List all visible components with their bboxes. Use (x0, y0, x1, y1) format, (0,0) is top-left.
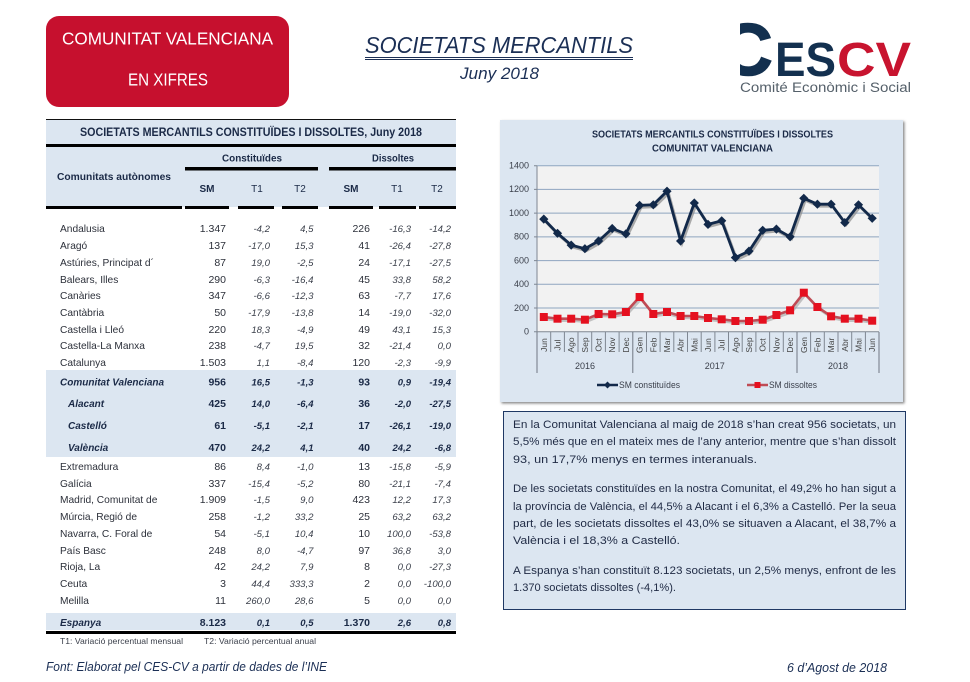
table rows: remaining communities: 337 (208, 478, 226, 490)
table rows: remaining communities: 0,0 (438, 596, 452, 607)
table rows: autonomous communities: 120 (352, 357, 370, 369)
table rows: remaining communities: 8 (364, 561, 370, 573)
table title band (46, 119, 456, 207)
table rows: remaining communities: -100,0 (424, 579, 452, 590)
chart title: SOCIETATS MERCANTILS CONSTITUÏDES I DISSOLTES (592, 130, 833, 140)
table rows: autonomous communities: 226 (352, 223, 370, 235)
table rows: autonomous communities: -13,8 (292, 308, 314, 319)
panel: commentary text (504, 412, 906, 610)
x axis ticks and month labels (537, 332, 879, 373)
table rows: remaining communities: 13 (358, 461, 370, 473)
table rows: remaining communities: Navarra, C. Foral de (60, 529, 153, 540)
table column headers: Constituïdes (222, 152, 282, 164)
table rows: remaining communities: 33,2 (295, 512, 314, 523)
highlighted band: Comunitat Valenciana and provinces: 24,2 (250, 443, 271, 454)
y axis labels: 400 (514, 279, 529, 289)
data series: SM constituïdes (544, 191, 874, 260)
x axis ticks and month labels: Feb (648, 337, 658, 352)
table rows: remaining communities: 2 (364, 578, 370, 590)
footer: source: Font: Elaborat pel CES-CV a partir de dades de l’INE (46, 660, 328, 674)
table rows: remaining communities: 0,0 (398, 579, 412, 590)
table rows: autonomous communities: -7,7 (394, 291, 412, 302)
table rows: remaining communities: 17,3 (432, 495, 452, 506)
table rows: autonomous communities: -32,0 (429, 308, 452, 319)
table rows: autonomous communities: -16,4 (292, 275, 314, 286)
table rows: autonomous communities: 15,3 (432, 325, 452, 336)
table column headers: SM (344, 184, 358, 195)
table rows: remaining communities: 10,4 (295, 529, 314, 540)
table rows: remaining communities: -1,5 (253, 495, 271, 506)
table rows: remaining communities: 63,2 (432, 512, 452, 523)
total row: Espanya: 0,5 (300, 618, 314, 629)
table rows: remaining communities: 42 (214, 561, 226, 573)
table rows: autonomous communities: 19,5 (295, 341, 314, 352)
footer: date: 6 d’Agost de 2018 (787, 661, 887, 675)
data series: SM dissoltes (544, 293, 874, 323)
table rows: remaining communities: 8,4 (257, 462, 270, 473)
x axis ticks and month labels: Feb (812, 337, 822, 352)
table rows: autonomous communities: Catalunya (60, 358, 106, 369)
table rows: remaining communities: 7,9 (300, 562, 314, 573)
panel: line chart (500, 120, 903, 402)
paragraph 2: la província de València, el 44,5% a Alacant i el 6,3% a Castelló. Per la seua (513, 501, 897, 513)
table rows: remaining communities: -5,1 (253, 529, 270, 540)
x axis ticks and month labels: Gen (635, 337, 645, 353)
highlighted band: Comunitat Valenciana and provinces: -2,1 (297, 421, 314, 432)
table rows: autonomous communities: -27,5 (429, 258, 452, 269)
table rows: remaining communities: 9,0 (300, 495, 314, 506)
table rows: remaining communities: 24,2 (250, 562, 271, 573)
title: Juny 2018 (459, 65, 540, 83)
table rows: remaining communities: -5,9 (434, 462, 452, 473)
table rows: autonomous communities: 24 (358, 257, 370, 269)
table rows: autonomous communities: -12,3 (292, 291, 314, 302)
x axis ticks and month labels: Ago (566, 337, 576, 353)
table rows: autonomous communities: 41 (358, 240, 370, 252)
table rows: remaining communities: 248 (208, 545, 226, 557)
table rows: autonomous communities: 43,1 (392, 325, 411, 336)
highlighted band: Comunitat Valenciana and provinces: 425 (208, 398, 226, 410)
highlighted band: Comunitat Valenciana and provinces: 0,9 (398, 378, 412, 388)
highlighted band: Comunitat Valenciana and provinces (46, 370, 456, 457)
table rows: autonomous communities: 32 (358, 340, 370, 352)
table rows: remaining communities: -1,0 (297, 462, 314, 473)
highlighted band: Comunitat Valenciana and provinces: 24,2 (392, 443, 412, 454)
table rows: autonomous communities: -4,2 (253, 224, 271, 235)
highlighted band: Comunitat Valenciana and provinces: -19,0 (429, 421, 452, 432)
paragraph 1: 5,5% més que en el mateix mes de l’any anterior, mentre que s’han dissolt (513, 436, 896, 448)
table rows: autonomous communities: 1,1 (257, 358, 270, 369)
total row: Espanya: 2,6 (397, 618, 412, 629)
table rows: autonomous communities: 63 (358, 290, 370, 302)
badge: Comunitat Valenciana en xifres: COMUNITAT VALENCIANA (62, 28, 273, 48)
badge: Comunitat Valenciana en xifres (46, 16, 289, 107)
table rows: autonomous communities: Aragó (60, 241, 88, 252)
highlighted band: Comunitat Valenciana and provinces: -27,5 (429, 399, 452, 410)
paragraph 1: En la Comunitat Valenciana al maig de 2018 s’han creat 956 societats, un (513, 419, 896, 431)
x axis ticks and month labels: Abr (676, 338, 686, 352)
paragraph 2: part, de les societats dissoltes el 43,0% se situaven a Alacant, el 38,7% a (513, 518, 897, 530)
table rows: remaining communities: Ceuta (60, 579, 88, 590)
x axis ticks and month labels: Jul (552, 339, 562, 350)
table rows: autonomous communities: -16,3 (389, 224, 412, 235)
table column headers: T1 (251, 184, 263, 195)
table rows: autonomous communities: -26,4 (389, 241, 411, 252)
table rows: remaining communities: -7,4 (434, 479, 451, 490)
table rows: autonomous communities: -2,3 (394, 358, 412, 369)
table rows: remaining communities: 1.909 (200, 494, 226, 506)
table rows: remaining communities: 63,2 (392, 512, 412, 523)
highlighted band: Comunitat Valenciana and provinces: 956 (208, 376, 226, 388)
x axis ticks and month labels: Nov (771, 337, 781, 353)
highlighted band: Comunitat Valenciana and provinces: -5,1 (254, 421, 270, 432)
total row: Espanya: Espanya (60, 618, 102, 629)
logo: CES CV: CV (837, 34, 911, 87)
table rows: autonomous communities: 4,5 (300, 224, 314, 235)
table notes: T1: Variació percentual mensual (60, 636, 183, 646)
table rows: autonomous communities: -6,3 (253, 275, 271, 286)
x axis ticks and month labels: 2016 (575, 361, 595, 371)
table rows: autonomous communities: 58,2 (432, 275, 452, 286)
table column headers: Comunitats autònomes (57, 171, 171, 183)
table rows: autonomous communities: -19,0 (389, 308, 412, 319)
total row: Espanya (46, 613, 456, 634)
table rows: autonomous communities: 347 (208, 290, 226, 302)
x axis ticks and month labels: 2018 (828, 361, 848, 371)
table rows: remaining communities: 12,2 (392, 495, 412, 506)
table rows: remaining communities: 258 (208, 511, 226, 523)
table rows: remaining communities: 100,0 (387, 529, 412, 540)
table rows: remaining communities: -1,2 (253, 512, 271, 523)
table rows: remaining communities: 86 (214, 461, 226, 473)
table rows: remaining communities: 28,6 (294, 596, 314, 607)
title: SOCIETATS MERCANTILS (365, 32, 634, 58)
table rows: autonomous communities: -2,5 (297, 258, 314, 269)
total row: Espanya: 8.123 (200, 617, 226, 629)
table rows: autonomous communities: 0,0 (438, 341, 452, 352)
x axis ticks and month labels: Mar (826, 338, 836, 352)
x axis ticks and month labels: Dec (785, 337, 795, 353)
y axis labels: 1000 (509, 208, 529, 218)
table notes: T2: Variació percentual anual (204, 636, 316, 646)
plot area and gridlines (534, 166, 879, 332)
table rows: autonomous communities: 50 (214, 307, 226, 319)
highlighted band: Comunitat Valenciana and provinces: 17 (358, 420, 370, 432)
table rows: remaining communities: 36,8 (392, 546, 412, 557)
table rows: remaining communities: Rioja, La (60, 562, 101, 573)
table title band: SOCIETATS MERCANTILS CONSTITUÏDES I DISSOLTES, Juny 2018 (80, 126, 423, 139)
table rows: autonomous communities: 19,0 (251, 258, 271, 269)
highlighted band: Comunitat Valenciana and provinces: 61 (214, 420, 226, 432)
total row: Espanya: 0,8 (438, 618, 452, 629)
paragraph 3 (513, 565, 897, 594)
x axis ticks and month labels: Mai (854, 338, 864, 352)
table rows: autonomous communities: Castella-La Manxa (60, 341, 145, 352)
table rows: autonomous communities: 1.347 (200, 223, 226, 235)
table rows: remaining communities: 5 (364, 595, 370, 607)
table rows: autonomous communities: -8,4 (297, 358, 314, 369)
table rows: remaining communities: -4,7 (297, 546, 314, 557)
table column headers: T2 (431, 184, 443, 195)
paragraph 1 (513, 419, 896, 466)
table rows: autonomous communities: -6,6 (253, 291, 271, 302)
panel: data table (46, 119, 456, 646)
table rows: autonomous communities: 14 (358, 307, 370, 319)
x axis ticks and month labels: Ago (730, 337, 740, 353)
table rows: autonomous communities: 45 (358, 274, 370, 286)
table rows: remaining communities: 333,3 (289, 579, 314, 590)
x axis ticks and month labels: Nov (607, 337, 617, 353)
highlighted band: Comunitat Valenciana and provinces: -6,8 (435, 443, 452, 454)
chart title (592, 130, 833, 154)
y axis labels: 0 (524, 326, 529, 336)
table rows: autonomous communities: Cantàbria (60, 308, 105, 319)
table rows: remaining communities: -15,4 (248, 479, 270, 490)
table rows: autonomous communities: Castella i Lleó (60, 325, 124, 336)
table rows: autonomous communities: -27,8 (429, 241, 452, 252)
table rows: remaining communities: 0,0 (398, 562, 412, 573)
table rows: autonomous communities: Astúries, Principat d´ (60, 257, 154, 269)
table rows: remaining communities: 11 (215, 595, 226, 607)
table rows: remaining communities: Galícia (60, 479, 92, 490)
table rows: autonomous communities: -17,1 (389, 258, 411, 269)
y axis labels: 600 (514, 255, 529, 265)
x axis ticks and month labels: Gen (799, 337, 809, 353)
highlighted band: Comunitat Valenciana and provinces: -6,4 (297, 399, 314, 410)
x axis ticks and month labels: Jun (867, 338, 877, 352)
table rows: autonomous communities: Andalusia (60, 224, 105, 235)
chart title: COMUNITAT VALENCIANA (652, 144, 773, 154)
table rows: autonomous communities (60, 223, 452, 369)
x axis ticks and month labels: Jun (539, 338, 549, 352)
table column headers (46, 152, 456, 209)
highlighted band: Comunitat Valenciana and provinces: Alacant (67, 399, 105, 410)
table rows: remaining communities: -21,1 (389, 479, 411, 490)
x axis ticks and month labels: 2017 (705, 361, 725, 371)
x axis ticks and month labels: Jun (703, 338, 713, 352)
paragraph 2: De les societats constituïdes en la nostra Comunitat, el 49,2% ho han sigut a (513, 483, 897, 495)
total row: Espanya: 0,1 (257, 618, 270, 629)
table rows: remaining communities: -15,8 (389, 462, 412, 473)
table rows: autonomous communities: 87 (214, 257, 226, 269)
table rows: autonomous communities: 49 (358, 324, 370, 336)
table rows: autonomous communities: 33,8 (392, 275, 412, 286)
table rows: remaining communities: 44,4 (251, 579, 270, 590)
table rows: autonomous communities: -14,2 (429, 224, 452, 235)
table rows: autonomous communities: 220 (208, 324, 226, 336)
y axis labels: 1200 (509, 184, 529, 194)
paragraph 1: 93, un 17,7% menys en termes interanuals. (513, 454, 757, 466)
highlighted band: Comunitat Valenciana and provinces: 93 (358, 376, 370, 388)
x axis ticks and month labels: Mai (689, 338, 699, 352)
highlighted band: Comunitat Valenciana and provinces: 36 (358, 398, 370, 410)
table rows: remaining communities: 423 (352, 494, 370, 506)
table rows: autonomous communities: 1.503 (200, 357, 226, 369)
x axis ticks and month labels: Abr (840, 338, 850, 352)
highlighted band: Comunitat Valenciana and provinces: -2,0 (395, 399, 412, 410)
table rows: remaining communities: 3,0 (438, 546, 452, 557)
table rows: autonomous communities: 17,6 (432, 291, 452, 302)
paragraph 3: A Espanya s’han constituït 8.123 societats, un 2,5% menys, enfront de les (513, 565, 897, 577)
highlighted band: Comunitat Valenciana and provinces: -19,4 (429, 378, 452, 388)
highlighted band: Comunitat Valenciana and provinces: València (68, 443, 109, 454)
total row: Espanya: 1.370 (344, 617, 370, 629)
table rows: remaining communities: -5,2 (297, 479, 314, 490)
table rows: remaining communities: Múrcia, Regió de (60, 512, 137, 523)
table rows: autonomous communities: -4,9 (297, 325, 314, 336)
table notes (60, 636, 316, 646)
highlighted band: Comunitat Valenciana and provinces: Castelló (68, 421, 107, 432)
y axis labels: 800 (514, 232, 529, 242)
table rows: remaining communities: 25 (358, 511, 370, 523)
table rows: autonomous communities: -9,9 (434, 358, 452, 369)
table rows: autonomous communities: 137 (208, 240, 226, 252)
table rows: remaining communities: Madrid, Comunitat de (60, 495, 158, 506)
paragraph 3: 1.370 societats dissoltes (-4,1%). (513, 582, 676, 594)
logo: CES CV: C (720, 10, 773, 91)
table rows: autonomous communities: -4,7 (253, 341, 271, 352)
highlighted band: Comunitat Valenciana and provinces: -1,3 (297, 378, 314, 388)
table column headers: T1 (391, 184, 403, 195)
highlighted band: Comunitat Valenciana and provinces: 40 (358, 442, 370, 454)
y axis labels: 200 (514, 303, 529, 313)
x axis ticks and month labels: Jul (717, 339, 727, 350)
logo: CES CV: ES (775, 34, 836, 87)
table rows: remaining communities: Melilla (60, 596, 89, 607)
y axis labels: 1400 (509, 160, 529, 170)
table rows: remaining communities: -27,3 (429, 562, 452, 573)
highlighted band: Comunitat Valenciana and provinces: Comunitat Valenciana (60, 378, 165, 388)
table rows: remaining communities: -53,8 (429, 529, 452, 540)
table column headers: SM (200, 184, 214, 195)
x axis ticks and month labels: Sep (744, 337, 754, 353)
table rows: remaining communities: 260,0 (245, 596, 271, 607)
highlighted band: Comunitat Valenciana and provinces: 16,5 (252, 378, 271, 388)
table rows: remaining communities: 80 (358, 478, 370, 490)
logo: CES CV: Comité Econòmic i Social (740, 80, 911, 95)
chart legend: SM constituïdes (619, 380, 680, 390)
table rows: remaining communities: 10 (358, 528, 370, 540)
table column headers: T2 (294, 184, 306, 195)
logo: CES CV (740, 22, 911, 92)
table rows: autonomous communities: 290 (208, 274, 226, 286)
y axis labels (509, 160, 529, 336)
table rows: autonomous communities: Balears, Illes (60, 275, 118, 286)
table rows: autonomous communities: -17,0 (248, 241, 271, 252)
table rows: remaining communities: 0,0 (398, 596, 412, 607)
table rows: remaining communities: Extremadura (60, 462, 119, 473)
table rows: autonomous communities: 18,3 (251, 325, 271, 336)
highlighted band: Comunitat Valenciana and provinces: 470 (208, 442, 226, 454)
table rows: remaining communities (60, 461, 452, 607)
table rows: autonomous communities: 15,3 (295, 241, 314, 252)
highlighted band: Comunitat Valenciana and provinces: 4,1 (299, 443, 314, 454)
paragraph 2: València i el 18,3% a Castelló. (513, 535, 680, 547)
x axis ticks and month labels: Mar (662, 338, 672, 352)
chart legend (597, 380, 817, 390)
table rows: autonomous communities: Canàries (60, 291, 101, 302)
chart legend: SM dissoltes (769, 380, 817, 390)
table rows: remaining communities: País Basc (60, 546, 106, 557)
table rows: remaining communities: 3 (220, 578, 226, 590)
x axis ticks and month labels: Oct (758, 338, 768, 352)
highlighted band: Comunitat Valenciana and provinces: 14,0 (252, 399, 271, 410)
table rows: autonomous communities: 238 (208, 340, 226, 352)
table column headers: Dissoltes (372, 152, 414, 164)
table rows: remaining communities: 54 (214, 528, 226, 540)
table rows: remaining communities: 97 (358, 545, 370, 557)
x axis ticks and month labels: Oct (594, 338, 604, 352)
table rows: autonomous communities: -21,4 (389, 341, 411, 352)
paragraph 2 (513, 483, 897, 547)
table rows: autonomous communities: -17,9 (248, 308, 271, 319)
table rows: remaining communities: 8,0 (257, 546, 271, 557)
x axis ticks and month labels: Dec (621, 337, 631, 353)
highlighted band: Comunitat Valenciana and provinces: -26,1 (389, 421, 411, 432)
title (365, 32, 634, 83)
badge: Comunitat Valenciana en xifres: EN XIFRES (128, 70, 208, 90)
x axis ticks and month labels: Sep (580, 337, 590, 353)
